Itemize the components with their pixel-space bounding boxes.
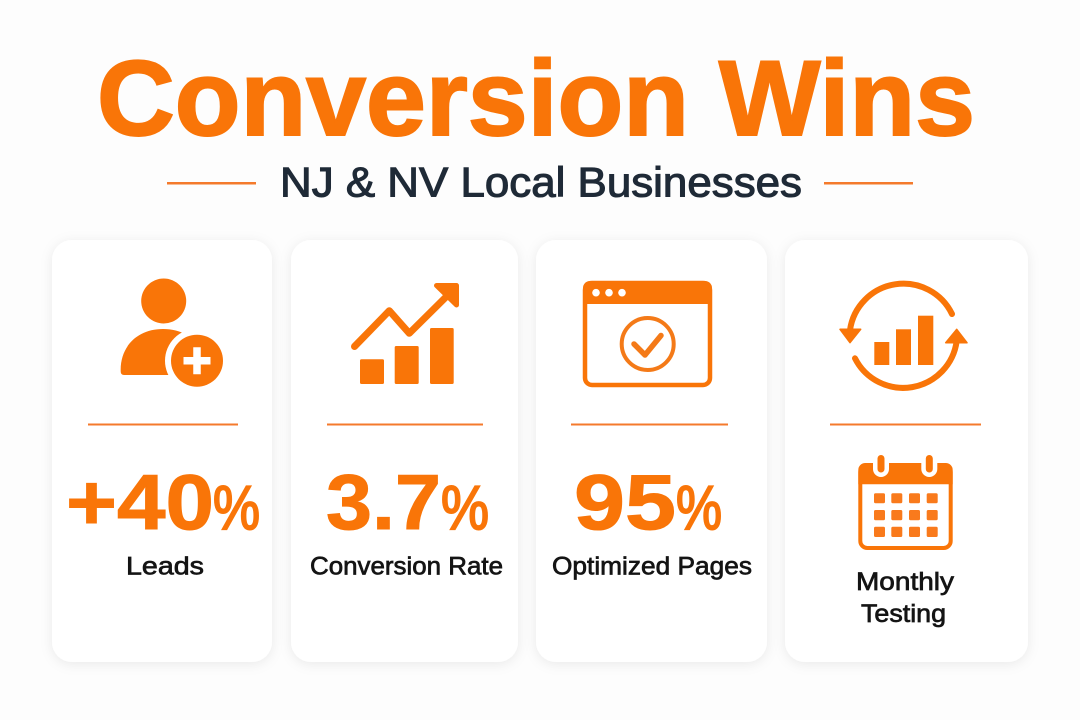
stat: 95%: 95 <box>574 458 676 546</box>
stat: +40%: +40 <box>66 458 214 546</box>
title: Conversion Wins <box>97 38 975 158</box>
label: Monthly Testing: Monthly <box>856 568 955 596</box>
stat: 3.7%: 3.7 <box>326 458 441 546</box>
panel: leads <box>52 240 272 662</box>
stat: +40%: % <box>213 474 260 543</box>
label: Conversion Rate: Conversion Rate <box>310 552 503 580</box>
icon: cycle with bars <box>840 284 967 388</box>
icon: growth chart <box>354 286 456 384</box>
panel: conversion rate <box>291 240 518 662</box>
label: Leads: Leads <box>126 552 204 580</box>
panel: monthly testing <box>785 240 1028 662</box>
label: Optimized Pages: Optimized Pages <box>552 552 752 580</box>
stat: 95%: % <box>676 474 722 543</box>
icon: calendar <box>858 458 953 548</box>
subtitle with side rules: NJ & NV Local Businesses <box>280 158 802 206</box>
icon: person with plus <box>121 278 229 393</box>
stat: 3.7%: % <box>441 474 489 543</box>
panel: optimized pages <box>536 240 767 662</box>
label: Monthly Testing <box>856 568 955 628</box>
icon: browser window with check <box>583 281 712 385</box>
label: Monthly Testing: Testing <box>861 600 946 628</box>
